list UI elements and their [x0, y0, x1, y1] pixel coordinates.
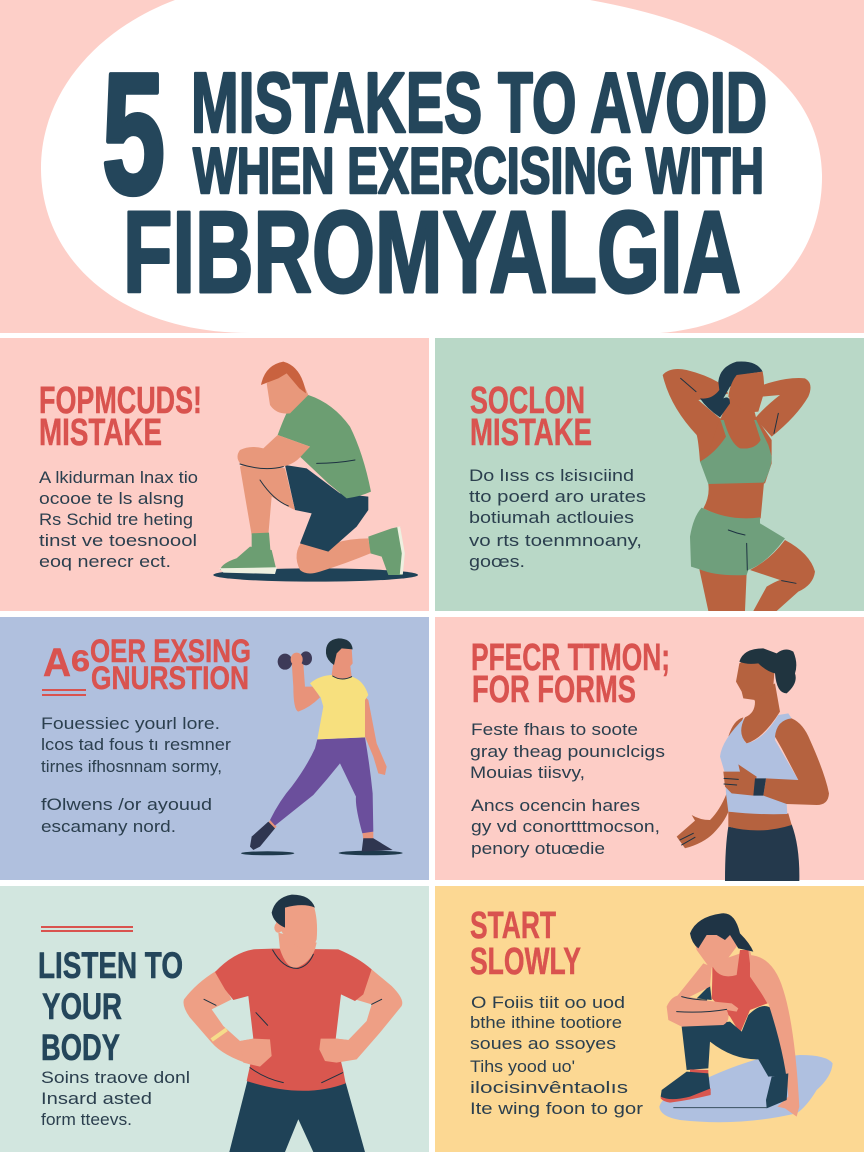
heading: perfection for forms — [471, 637, 670, 711]
text: over exercising description: Fouessiec yourl lore. — [41, 715, 220, 733]
title — [102, 38, 767, 317]
text: perfection description: gray theag pounıclcigs — [470, 743, 665, 761]
text: start slowly description: ilocisinvêntaolıs — [470, 1079, 628, 1097]
heading: over exercising: A — [43, 641, 71, 685]
heading: perfection for forms: FOR FORMS — [472, 669, 636, 711]
illustration: woman checking posture — [677, 648, 829, 881]
panel: first mistake — [0, 338, 429, 611]
text: over exercising description: lcos tad fous tı resmner — [41, 736, 232, 754]
heading: first mistake: FOPMCUDS! — [39, 380, 202, 422]
text: first mistake description: tinst ve toesnoool — [39, 532, 197, 550]
text: second mistake description — [469, 467, 646, 571]
text: listen description — [41, 1069, 190, 1129]
text: second mistake description: goœs. — [469, 553, 525, 571]
heading: start slowly: START — [470, 905, 556, 947]
text: first mistake description: ocooe te ls alsng — [39, 490, 184, 508]
heading: perfection for forms: PFECR TTMON; — [471, 637, 670, 679]
panel: perfection for forms — [435, 617, 864, 881]
text: first mistake description — [39, 469, 198, 571]
heading: listen to your body: BODY — [41, 1027, 120, 1068]
text: start slowly description: Ite wing foon to gor — [470, 1100, 644, 1118]
text: second mistake description: tto poerd aro urates — [469, 488, 646, 506]
header band — [0, 0, 864, 333]
text: start slowly description: Tihs yood uo' — [470, 1058, 575, 1076]
text: perfection description — [470, 721, 665, 858]
text: first mistake description: eoq nerecr ect. — [39, 553, 171, 571]
heading: over exercising — [42, 633, 251, 696]
heading: second mistake: MISTAKE — [470, 412, 592, 454]
illustration: man hands on hips — [183, 895, 402, 1152]
heading: listen to your body: LISTEN TO — [38, 945, 183, 986]
text: first mistake description: A lkidurman lnax tio — [39, 469, 198, 487]
accent lines — [41, 926, 133, 932]
illustration: woman stretching — [663, 361, 815, 611]
panel: start slowly — [435, 886, 864, 1152]
text: perfection description: penory otuœdie — [471, 840, 605, 858]
heading: over exercising: 6 — [71, 645, 90, 678]
heading: listen to your body — [38, 945, 183, 1068]
text: over exercising description: tirnes ifhosnnam sormy, — [41, 758, 222, 776]
heading: over exercising: OER EXSING — [90, 633, 251, 669]
text: start slowly description: O Foiis tiit oo uod — [471, 994, 625, 1012]
heading: second mistake — [470, 380, 592, 454]
heading: second mistake: SOCLON — [470, 380, 585, 422]
heading: start slowly: SLOWLY — [470, 941, 581, 983]
text: first mistake description: Rs Schid tre heting — [39, 511, 193, 529]
illustration: man lifting dumbbell — [241, 638, 403, 855]
text: start slowly description — [470, 994, 644, 1118]
heading: over exercising: GNURSTION — [91, 660, 249, 696]
heading: listen to your body: YOUR — [42, 986, 122, 1027]
panel: listen to your body — [0, 886, 429, 1152]
text: second mistake description: vo rts toenmnoany, — [469, 532, 642, 550]
text: second mistake description: botiumah actlouies — [469, 509, 634, 527]
title: 5 — [102, 38, 165, 230]
panel: over exercising — [0, 617, 429, 880]
illustration: crouching woman on mat — [659, 913, 833, 1122]
text: perfection description: Mouias tiisvy, — [470, 764, 585, 782]
text: over exercising description: fOlwens /or ayouud — [41, 796, 212, 814]
text: over exercising description: escamany nord. — [41, 818, 176, 836]
text: listen description: Insard asted — [41, 1090, 152, 1108]
text: listen description: form tteevs. — [41, 1111, 132, 1129]
text: perfection description: Feste fhaıs to soote — [471, 721, 638, 739]
text: over exercising description — [41, 715, 232, 836]
heading: first mistake — [39, 380, 202, 454]
heading: first mistake: MISTAKE — [39, 412, 162, 454]
text: start slowly description: bthe ithine tootiore — [470, 1014, 622, 1032]
text: start slowly description: soues ao ssoyes — [470, 1035, 616, 1053]
text: perfection description: gy vd conortttmocson, — [471, 818, 660, 836]
illustration: kneeling man — [213, 362, 418, 582]
text: perfection description: Ancs ocencin hares — [471, 797, 640, 815]
panel: second mistake — [435, 338, 864, 611]
heading: start slowly — [470, 905, 581, 983]
text: listen description: Soins traove donl — [41, 1069, 190, 1087]
text: second mistake description: Do lıss cs lɛisıciind — [469, 467, 634, 485]
